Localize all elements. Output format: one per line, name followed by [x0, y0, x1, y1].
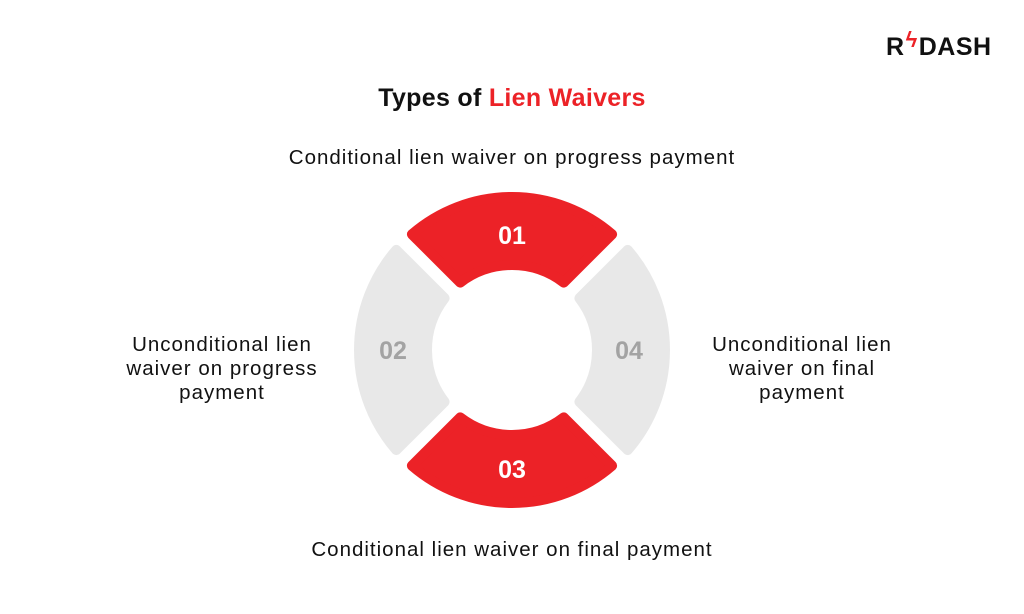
label 02: Unconditional lien [132, 333, 312, 356]
label 03: Conditional lien waiver on final payment [311, 538, 713, 561]
segment 02: 02 [379, 337, 407, 365]
title: Types of Lien Waivers [378, 84, 646, 112]
segment 03 [412, 417, 612, 503]
logo: RϟDASH [886, 27, 992, 61]
label 02: payment [179, 381, 265, 404]
segment 04 [579, 250, 665, 450]
label 04: Unconditional lien [712, 333, 892, 356]
segment 04: 04 [615, 337, 643, 365]
label 02: waiver on progress [126, 357, 318, 380]
segment 03: 03 [498, 456, 526, 484]
label 02 [126, 333, 318, 404]
segment 01: 01 [498, 222, 526, 250]
segment 01 [412, 197, 612, 283]
label 01: Conditional lien waiver on progress payment [289, 146, 735, 169]
label 04: payment [759, 381, 845, 404]
segment 02 [359, 250, 445, 450]
label 04: waiver on final [729, 357, 875, 380]
label 04 [712, 333, 892, 404]
